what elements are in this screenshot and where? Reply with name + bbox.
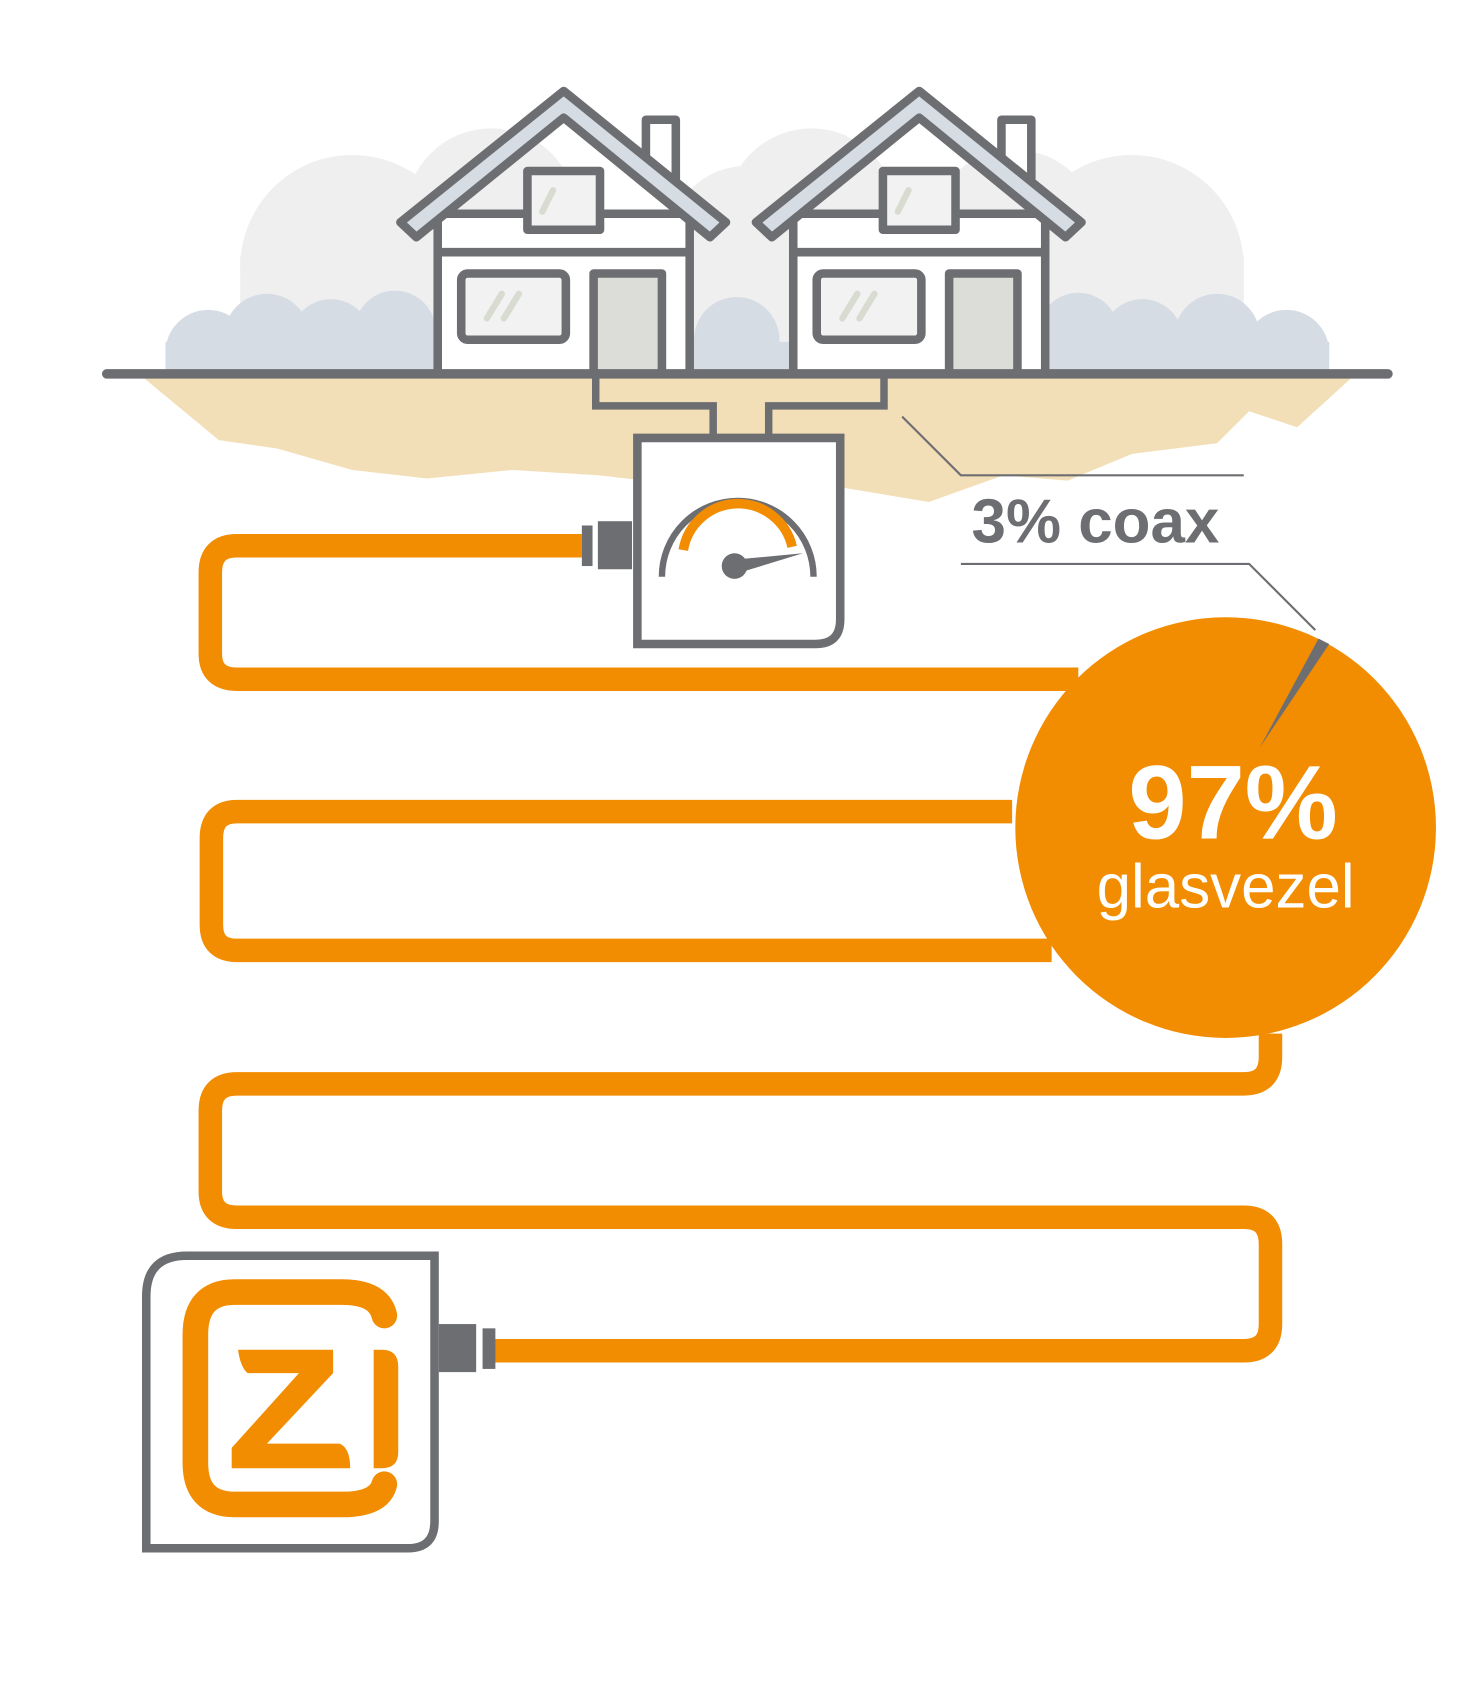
background clouds (240, 128, 1244, 379)
ziggo box (146, 1256, 495, 1548)
circle 97%: glasvezel (1097, 853, 1355, 922)
cable (210, 546, 1270, 1351)
house 2 (756, 91, 1082, 374)
meter box (582, 438, 840, 644)
bushes (165, 291, 1329, 395)
house 1 (400, 91, 726, 374)
circle 97%: 97% (1128, 744, 1338, 861)
circle 97% (1015, 617, 1436, 1038)
ground line (107, 369, 1388, 378)
callout lines (902, 417, 1315, 630)
label 3% coax: 3% coax (972, 488, 1219, 557)
pipes (596, 376, 884, 438)
soil (139, 374, 1356, 502)
